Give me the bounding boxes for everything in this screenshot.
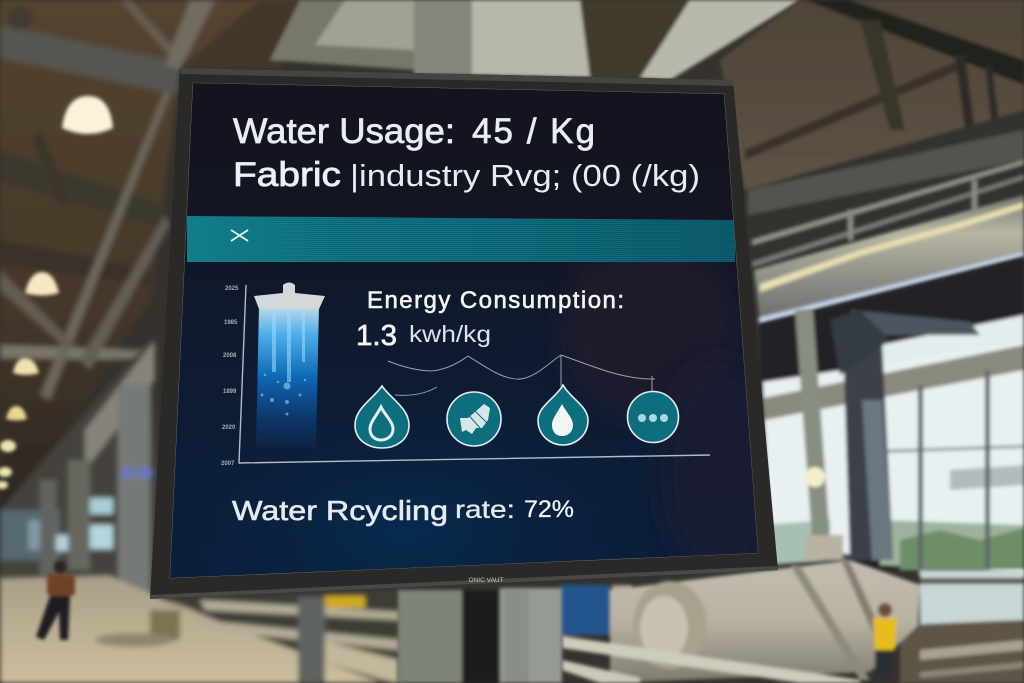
water recycling rate [232, 500, 574, 526]
water recycling rate: rate: [455, 496, 515, 524]
icon: fabric circle [447, 392, 501, 446]
centre pole base [398, 588, 562, 683]
monitor brand label: ONIC VAUT [469, 577, 503, 584]
ceiling lamps [0, 96, 113, 489]
teal band [187, 216, 735, 262]
floor [0, 575, 400, 683]
icon: close cross [231, 230, 248, 241]
chart axes with tick labels: 2007 [221, 461, 235, 467]
pipe [754, 195, 1024, 324]
heading: water usage: Water Usage: [233, 112, 455, 151]
icon: more dots circle [628, 392, 678, 442]
screen [170, 83, 780, 580]
chart axes with tick labels: 2020 [222, 425, 236, 431]
heading: fabric industry average [236, 160, 698, 192]
ceiling left [0, 0, 310, 520]
chart axes with tick labels [221, 285, 710, 467]
water recycling rate: Water Rcycling [232, 495, 448, 526]
heading: water usage: 45 / Kg [472, 112, 595, 151]
chart axes with tick labels: 1899 [223, 389, 237, 395]
hall side left [0, 340, 165, 635]
windows right [760, 257, 1024, 580]
icon: water drop outline [355, 386, 409, 448]
heading: fabric industry average: |industry Rvg; (00 (/kg) [350, 158, 700, 193]
energy value [358, 324, 490, 347]
chart axes with tick labels: 2008 [223, 353, 237, 359]
top centre structure [180, 0, 800, 80]
lower right machinery [560, 558, 1024, 683]
energy consumption label: Energy Consumption: [367, 287, 624, 314]
icon: water drop solid [538, 385, 588, 445]
chart axes with tick labels: 2025 [225, 286, 239, 292]
energy value: 1.3 [356, 320, 397, 352]
line trend [388, 355, 655, 395]
heading: fabric industry average: Fabric [233, 156, 341, 194]
chart axes with tick labels: 1985 [224, 320, 238, 326]
water filter column [254, 282, 325, 448]
water recycling rate: 72% [524, 496, 574, 523]
monitor frame [150, 68, 778, 599]
ceiling right [720, 0, 1024, 270]
person walking [36, 561, 75, 640]
energy value: kwh/kg [409, 321, 491, 347]
heading: water usage [232, 117, 594, 151]
